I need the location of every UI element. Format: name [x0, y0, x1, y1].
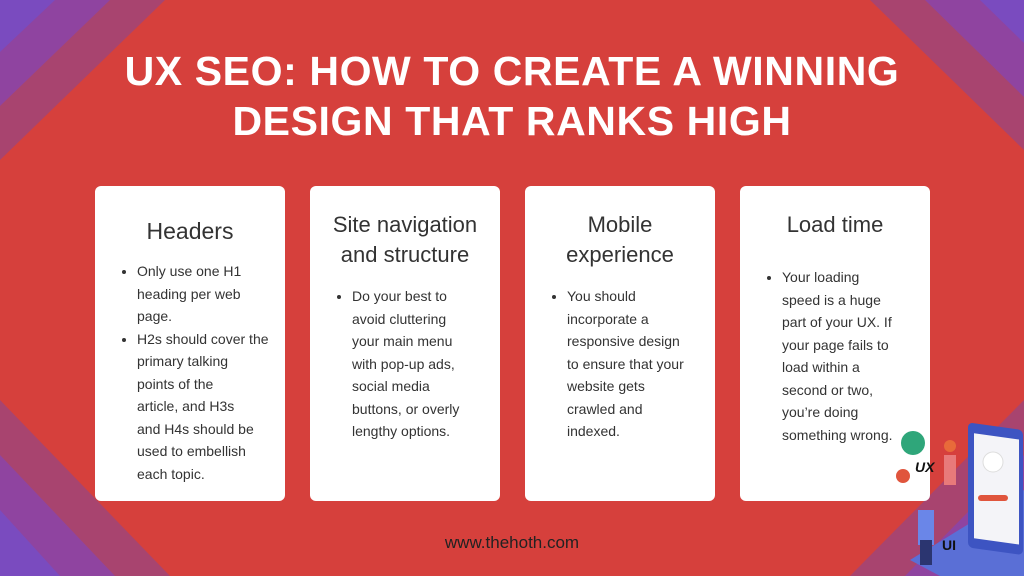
panel: headers: used to embellish: [137, 443, 246, 459]
title: UX SEO: HOW TO CREATE A WINNING: [125, 48, 899, 94]
panel: headers: article, and H3s: [137, 398, 234, 414]
panel: load time: Load time: [787, 212, 883, 237]
footer url: www.thehoth.com: [445, 533, 579, 552]
panel: headers: heading per web: [137, 286, 241, 302]
panel: headers: page.: [137, 308, 172, 324]
illustration: UX/UI phone: [896, 423, 1024, 576]
panel: mobile experience: experience: [566, 242, 674, 267]
panel: headers: primary talking: [137, 353, 228, 369]
panel: headers: Only use one H1: [137, 263, 241, 279]
panel: headers: points of the: [137, 376, 213, 392]
panel: mobile experience: You should incorporate a responsive design to ensure that your website gets crawled and indexed.: [567, 288, 684, 439]
panel: headers: H2s should cover the: [137, 330, 269, 346]
illustration: UX/UI phone: UI: [942, 537, 956, 553]
panel: load time: [740, 186, 930, 501]
panel: headers: and H4s should be: [137, 420, 254, 436]
panel: mobile experience: Mobile: [588, 212, 652, 237]
panel: mobile experience: [525, 186, 715, 501]
panel: site navigation: and structure: [341, 242, 469, 267]
panel: headers: Headers: [147, 218, 233, 244]
title: DESIGN THAT RANKS HIGH: [232, 98, 792, 144]
panel: headers: [95, 186, 285, 501]
panel: site navigation: [310, 186, 500, 501]
panel: site navigation: Do your best to avoid cluttering your main menu with pop-up ads, social media buttons, or overly lengthy options.: [352, 288, 459, 439]
panel: site navigation: Site navigation: [333, 212, 477, 237]
panel: load time: Your loading speed is a huge part of your UX. If your page fails to load within a second or two, you’re doing something wrong.: [782, 269, 893, 442]
panel: headers: each topic.: [137, 466, 205, 482]
illustration: UX/UI phone: UX: [915, 459, 936, 475]
title: [125, 48, 899, 144]
